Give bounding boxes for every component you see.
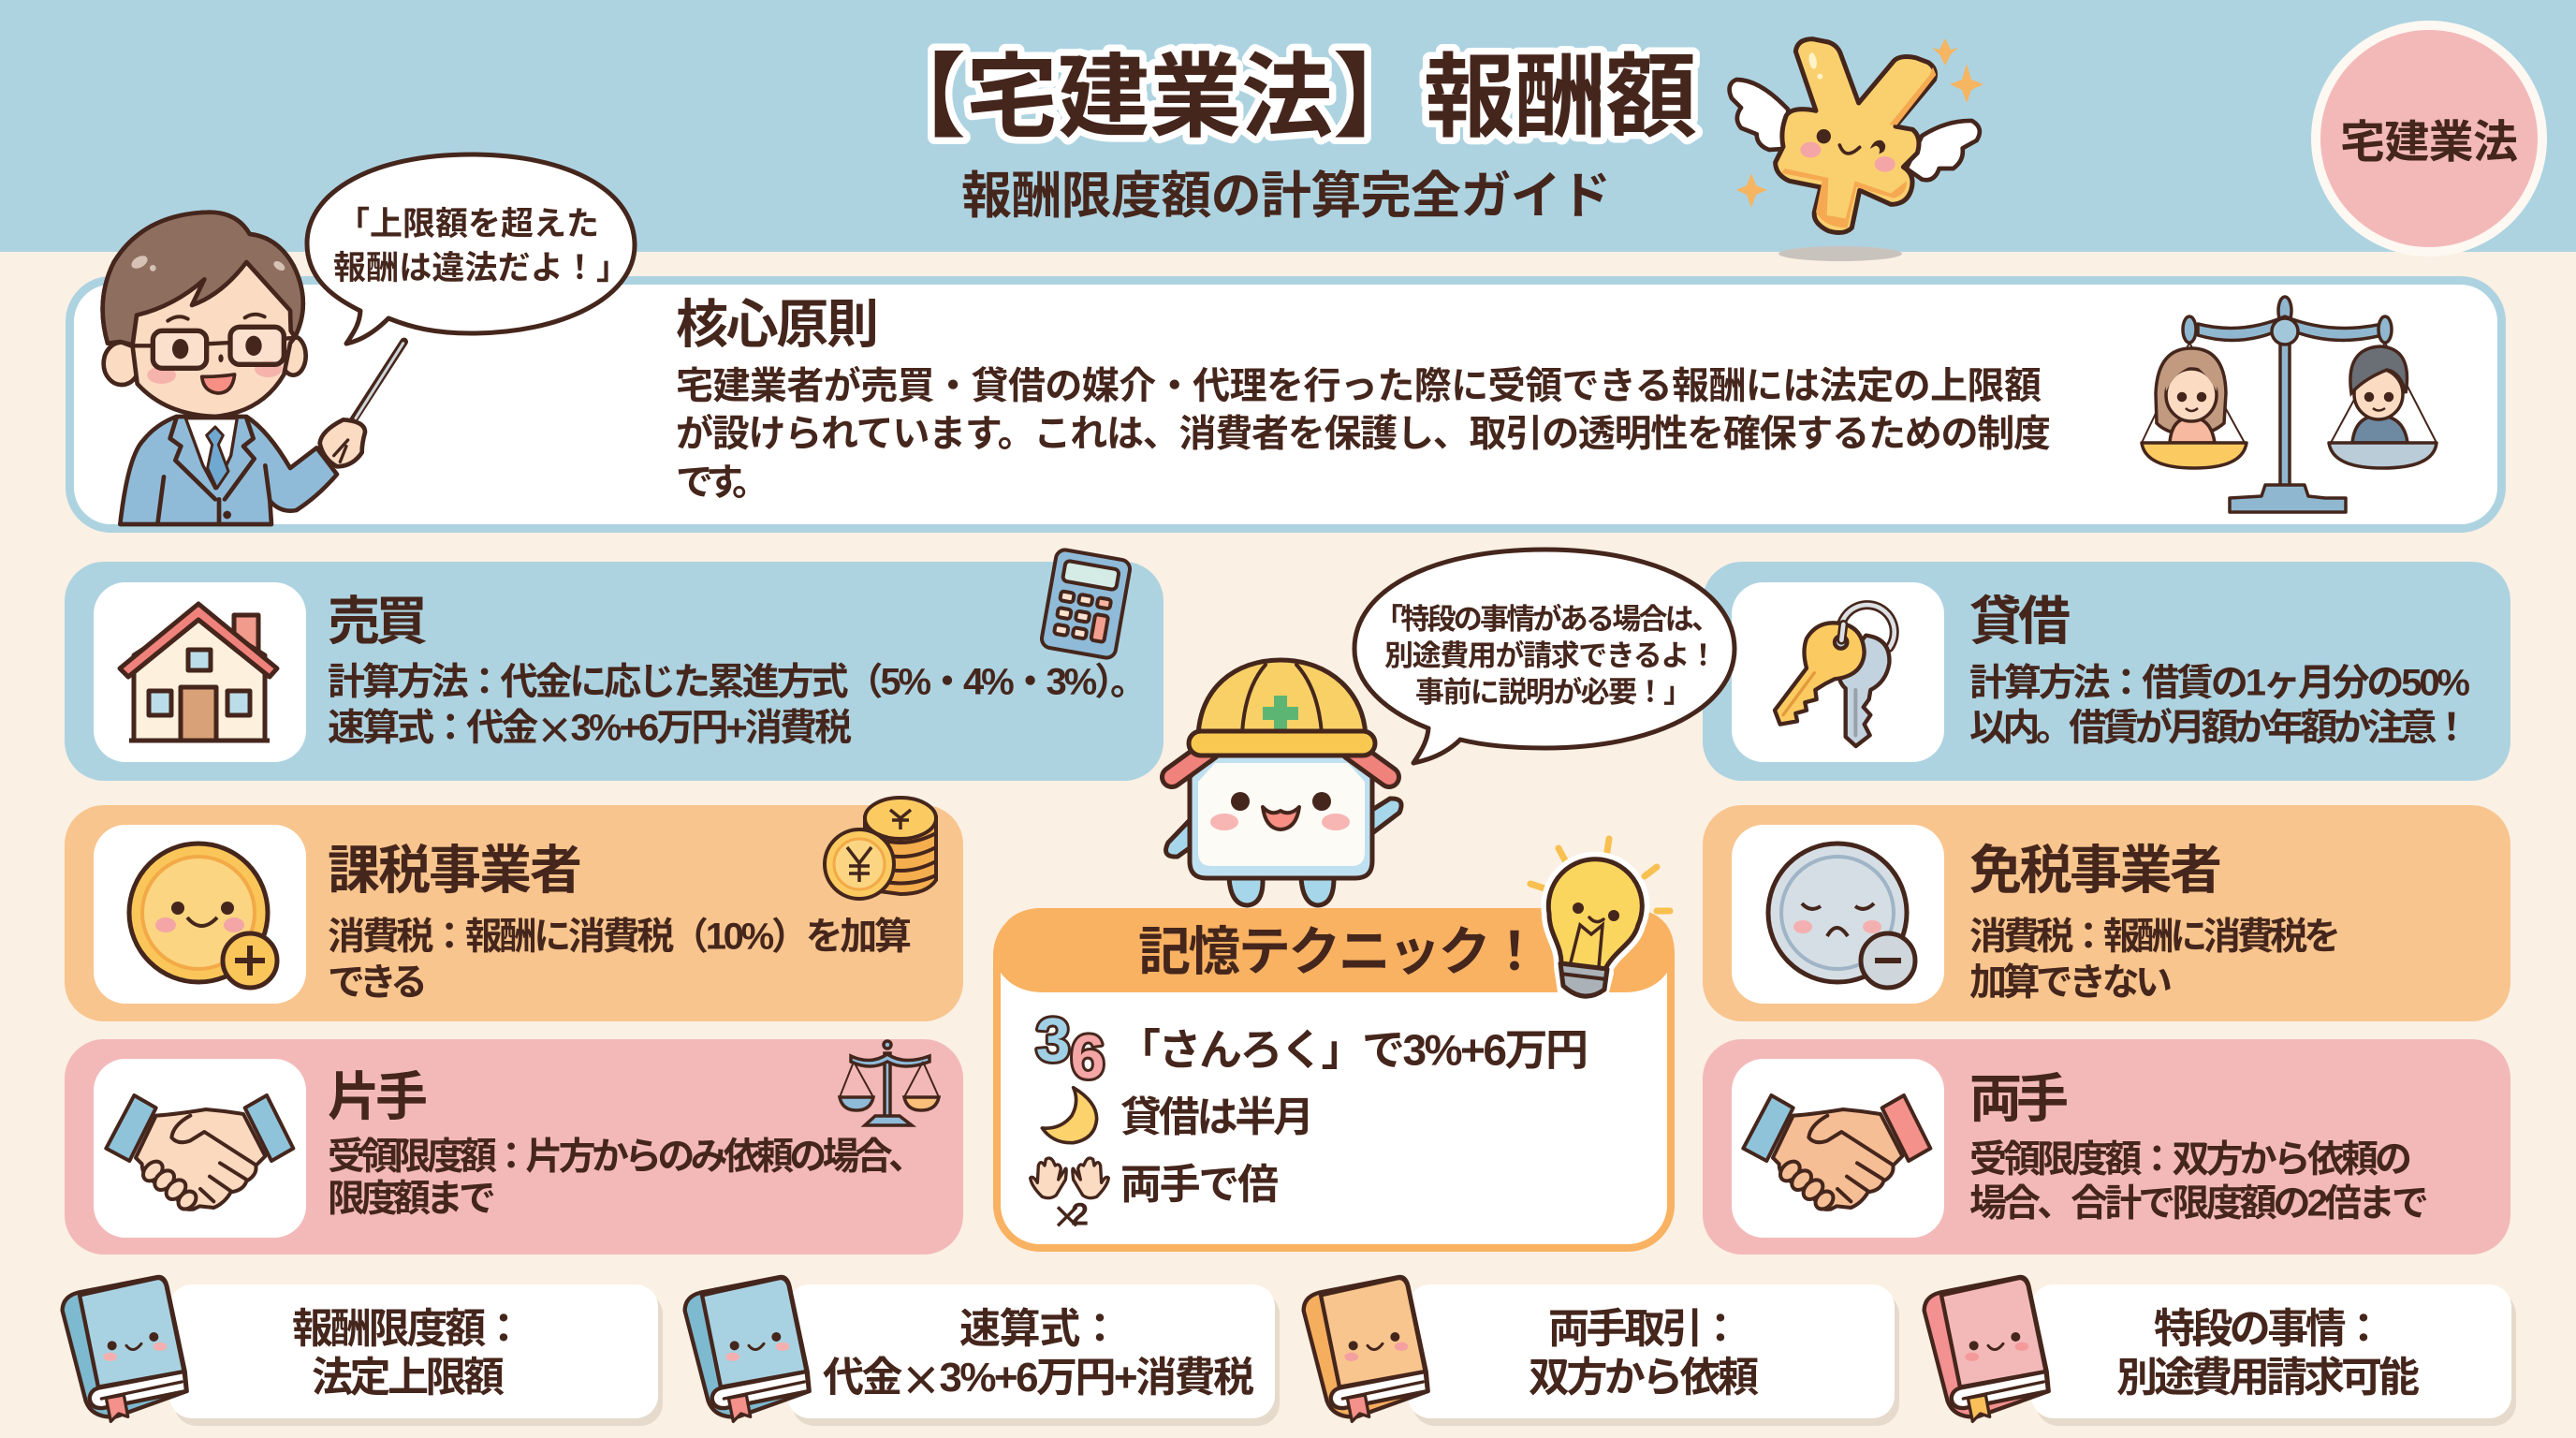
text: core principle body: です。	[676, 462, 769, 504]
glasses	[133, 338, 297, 345]
text: 両手取引: 両手取引：	[1548, 1306, 1741, 1352]
text: 免税事業者 body	[1969, 916, 2341, 1004]
text: 片手 body: 限度額まで	[328, 1178, 496, 1219]
text: 両手で倍: 両手で倍	[1120, 1162, 1279, 1208]
cheeks	[147, 366, 176, 384]
icon: smiling coin	[129, 844, 277, 988]
panel: 貸借	[1703, 562, 2510, 781]
panel: 売買	[65, 549, 1164, 781]
icon: light bulb	[1530, 839, 1670, 1000]
text: mascot speech: 別途費用が請求できるよ！	[1384, 639, 1718, 672]
icon: 3 and 6	[1036, 1005, 1105, 1092]
card: 速算式	[685, 1277, 1280, 1426]
heading: 核心原則: 核心原則	[676, 295, 879, 354]
text: 速算式	[823, 1306, 1254, 1408]
icon: sad coin	[1768, 844, 1915, 988]
text: teacher speech: 報酬は違法だよ！」	[333, 250, 629, 286]
icon: handshake	[106, 1095, 293, 1212]
icon: house	[120, 604, 277, 741]
text: 両手 body: 受領限度額：双方から依頼の	[1969, 1138, 2412, 1180]
icon: flying yen mascot	[1730, 38, 1983, 261]
person: man	[2350, 346, 2408, 443]
icon: crescent moon	[1042, 1088, 1097, 1143]
text: 免税事業者 body: 加算できない	[1969, 962, 2173, 1004]
hair and face	[103, 213, 303, 417]
title	[874, 45, 1697, 148]
text: 売買 body	[328, 661, 1148, 755]
icon: 3 and 6: 3	[1036, 1005, 1070, 1075]
text: 報酬限度額: 報酬限度額：	[292, 1306, 524, 1352]
card: 両手取引	[1304, 1277, 1899, 1426]
header band	[0, 0, 2576, 252]
text: teacher speech	[333, 206, 629, 286]
icon: handshake, both sides	[1743, 1095, 1930, 1212]
text: mascot speech: 事前に説明が必要！」	[1415, 676, 1692, 709]
text: 特段の事情: 特段の事情：	[2154, 1306, 2384, 1352]
panel: 両手	[1703, 1039, 2510, 1255]
panel: core principle	[69, 281, 2501, 528]
icon: orange book	[1304, 1277, 1428, 1421]
icon: 3 and 6: 6	[1071, 1022, 1105, 1092]
text: 報酬限度額: 法定上限額	[312, 1355, 505, 1401]
text: 速算式: 速算式：	[959, 1306, 1120, 1352]
text: 両手取引: 双方から依頼	[1529, 1355, 1759, 1401]
text: mascot speech: 「特段の事情がある場合は、	[1374, 603, 1720, 636]
icon: blue book	[685, 1277, 810, 1421]
icon: keys	[1775, 605, 1895, 746]
eyes	[172, 339, 188, 359]
text: 貸借 body: 計算方法：借賃の1ヶ月分の50%	[1969, 663, 2470, 704]
icon: calculator	[1040, 549, 1132, 659]
heading: 両手: 両手	[1969, 1069, 2069, 1128]
subtitle: 報酬限度額の計算完全ガイド	[961, 169, 1611, 225]
icon: pink book	[1925, 1277, 2049, 1421]
card: 報酬限度額	[63, 1277, 663, 1426]
icon: blue book	[63, 1277, 187, 1421]
text: 課税事業者 body: 消費税：報酬に消費税（10%）を加算	[328, 916, 912, 957]
text: 速算式: 代金×3%+6万円+消費税	[823, 1348, 1254, 1408]
heading: 片手: 片手	[328, 1067, 428, 1126]
text: 片手 body: 受領限度額：片方からのみ依頼の場合、	[328, 1137, 926, 1178]
text: 両手 body	[1969, 1138, 2429, 1225]
panel: 免税事業者	[1703, 805, 2510, 1021]
text: mascot speech	[1374, 603, 1720, 709]
pointer	[353, 342, 404, 421]
character: teacher	[103, 213, 404, 524]
badge: 宅建業法: 宅建業法	[2340, 118, 2518, 168]
text: 課税事業者 body	[328, 916, 912, 1004]
heading: 免税事業者: 免税事業者	[1969, 841, 2222, 900]
text: core principle body: が設けられています。これは、消費者を保護し、取引の透明性を確保するための制度	[676, 414, 2051, 455]
text: 免税事業者 body: 消費税：報酬に消費税を	[1969, 916, 2341, 957]
suit	[120, 417, 337, 524]
speech bubble: mascot	[1354, 550, 1734, 763]
text: 売買 body: 速算式：代金×3%+6万円+消費税	[328, 700, 852, 755]
text: 片手 body	[328, 1137, 926, 1219]
text: 報酬限度額	[292, 1306, 524, 1401]
text: 両手 body: 場合、合計で限度額の2倍まで	[1969, 1183, 2429, 1225]
heading: 課税事業者: 課税事業者	[328, 841, 582, 900]
icon: balance scale with people	[2142, 297, 2437, 512]
heading: 貸借: 貸借	[1969, 592, 2071, 651]
text: core principle body: 宅建業者が売買・貸借の媒介・代理を行った際に受領できる報酬には法定の上限額	[676, 365, 2042, 406]
text: 両手取引	[1529, 1306, 1759, 1401]
text: 貸借 body	[1969, 663, 2470, 749]
heading: 売買: 売買	[328, 592, 428, 651]
text: 特段の事情: 別途費用請求可能	[2116, 1355, 2420, 1401]
text: 課税事業者 body: できる	[328, 962, 428, 1004]
speech bubble: teacher	[307, 154, 635, 344]
text: さんろく: 「さんろく」で3%+6万円	[1118, 1026, 1588, 1075]
icon: small scale	[840, 1041, 939, 1125]
text: 貸借は半月: 貸借は半月	[1120, 1094, 1314, 1140]
panel: 課税事業者	[65, 798, 963, 1021]
character: house mascot with helmet	[1166, 660, 1401, 905]
text: 特段の事情	[2116, 1306, 2420, 1401]
text: 売買 body: 計算方法：代金に応じた累進方式（5%・4%・3%）。	[328, 661, 1148, 702]
icon: two hands ×2: ×2	[1051, 1192, 1089, 1238]
person: woman	[2156, 348, 2226, 443]
badge: 宅建業法	[2316, 25, 2542, 252]
title: 報酬額	[1424, 45, 1697, 148]
icon: two hands ×2	[1031, 1158, 1108, 1238]
text: 貸借 body: 以内。借賃が月額か年額か注意！	[1969, 708, 2470, 749]
title: 【宅建業法】	[874, 45, 1425, 148]
hand	[320, 419, 365, 466]
heading: 記憶テクニック！: 記憶テクニック！	[1138, 922, 1541, 981]
panel: memory technique	[993, 839, 1675, 1248]
text: core principle body	[676, 365, 2051, 504]
text: teacher speech: 「上限額を超えた	[337, 206, 599, 242]
ears	[104, 343, 139, 385]
card: 特段の事情	[1925, 1277, 2516, 1426]
panel: 片手	[65, 1039, 963, 1255]
icon: coin stack	[825, 798, 936, 899]
